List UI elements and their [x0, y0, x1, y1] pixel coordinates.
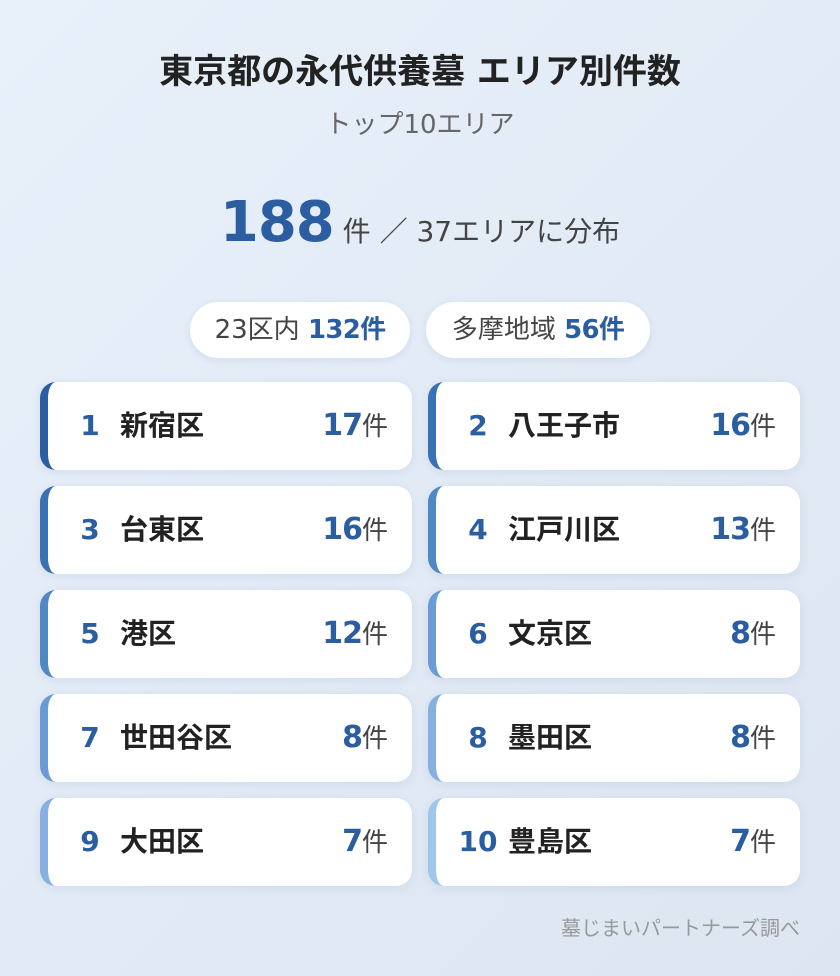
- card: rank 7: 世田谷区: [120, 721, 232, 754]
- card: rank 5: 港区: [120, 617, 176, 650]
- card: rank 10: 7件: [730, 824, 776, 859]
- card: rank 5: 5: [80, 617, 100, 650]
- card: rank 2: 八王子市: [508, 409, 620, 442]
- card: rank 2: 16件: [710, 408, 776, 443]
- card: rank 4: 13件: [710, 512, 776, 547]
- card: rank 6: 6: [468, 617, 488, 650]
- card: rank 10: [428, 798, 800, 886]
- card: rank 1: 1: [80, 409, 100, 442]
- card: rank 9: 大田区: [120, 825, 204, 858]
- source note: 墓じまいパートナーズ調べ: [561, 916, 800, 940]
- title: 東京都の永代供養墓 エリア別件数: [159, 52, 681, 92]
- card: rank 2: [428, 382, 800, 470]
- card: rank 1: 17件: [322, 408, 388, 443]
- card: rank 9: 9: [80, 825, 100, 858]
- card: rank 6: 文京区: [508, 617, 592, 650]
- card: rank 9: [40, 798, 412, 886]
- card: rank 4: [428, 486, 800, 574]
- card: rank 8: 8件: [730, 720, 776, 755]
- card: rank 2: 2: [468, 409, 488, 442]
- subtitle: トップ10エリア: [325, 110, 515, 140]
- card: rank 4: 4: [468, 513, 488, 546]
- card: rank 10: 10: [459, 825, 497, 858]
- card: rank 1: [40, 382, 412, 470]
- card: rank 7: 8件: [342, 720, 388, 755]
- card: rank 9: 7件: [342, 824, 388, 859]
- card: rank 5: 12件: [322, 616, 388, 651]
- total count headline: 188 件 ／ 37エリアに分布: [220, 190, 620, 255]
- card: rank 10: 豊島区: [508, 825, 592, 858]
- card: rank 5: [40, 590, 412, 678]
- card: rank 3: 16件: [322, 512, 388, 547]
- card: rank 8: 墨田区: [508, 721, 592, 754]
- card: rank 8: [428, 694, 800, 782]
- card: rank 3: 台東区: [120, 513, 204, 546]
- card: rank 6: 8件: [730, 616, 776, 651]
- pill: Tama region: 多摩地域 56件: [452, 315, 624, 345]
- card: rank 1: 新宿区: [120, 409, 204, 442]
- card: rank 8: 8: [468, 721, 488, 754]
- card: rank 3: [40, 486, 412, 574]
- card: rank 7: [40, 694, 412, 782]
- card: rank 6: [428, 590, 800, 678]
- pill: Tama region: [426, 302, 650, 358]
- card: rank 4: 江戸川区: [508, 513, 620, 546]
- card: rank 7: 7: [80, 721, 100, 754]
- pill: 23 wards: 23区内 132件: [215, 315, 385, 345]
- card: rank 3: 3: [80, 513, 100, 546]
- pill: 23 wards: [190, 302, 410, 358]
